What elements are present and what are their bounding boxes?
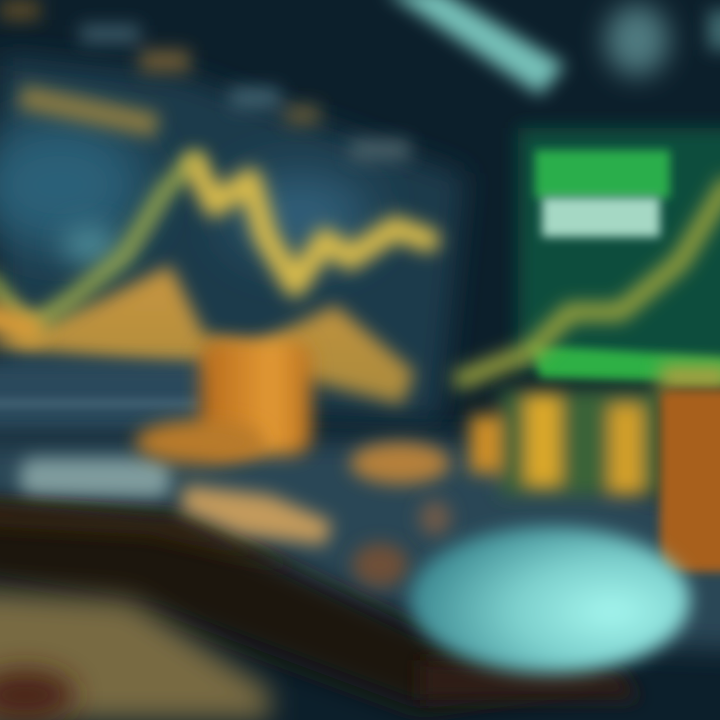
icon: gold coins bbox=[135, 340, 451, 587]
chart: yellow trend line bbox=[0, 160, 428, 330]
ceiling lights bbox=[385, 0, 720, 95]
screen label bbox=[542, 197, 660, 237]
green band bbox=[530, 345, 720, 384]
monitor blue glow bbox=[0, 120, 145, 250]
pale paper bbox=[20, 458, 170, 500]
chart: gold mountain area bbox=[0, 265, 415, 432]
panel: right screen bbox=[518, 128, 720, 384]
chart: right trend line bbox=[455, 180, 720, 382]
icon: glowing mouse bbox=[410, 526, 690, 674]
chart: right bars bbox=[470, 365, 720, 495]
icon: large orange cylinder bbox=[660, 390, 720, 572]
lower chart stripes bbox=[0, 362, 210, 432]
panel: desk surface bbox=[0, 440, 720, 720]
chart labels: top of left monitor bbox=[0, 0, 410, 160]
dark desk edge bbox=[0, 505, 620, 710]
screen header bbox=[535, 150, 670, 198]
panel: left monitor bbox=[0, 55, 465, 420]
